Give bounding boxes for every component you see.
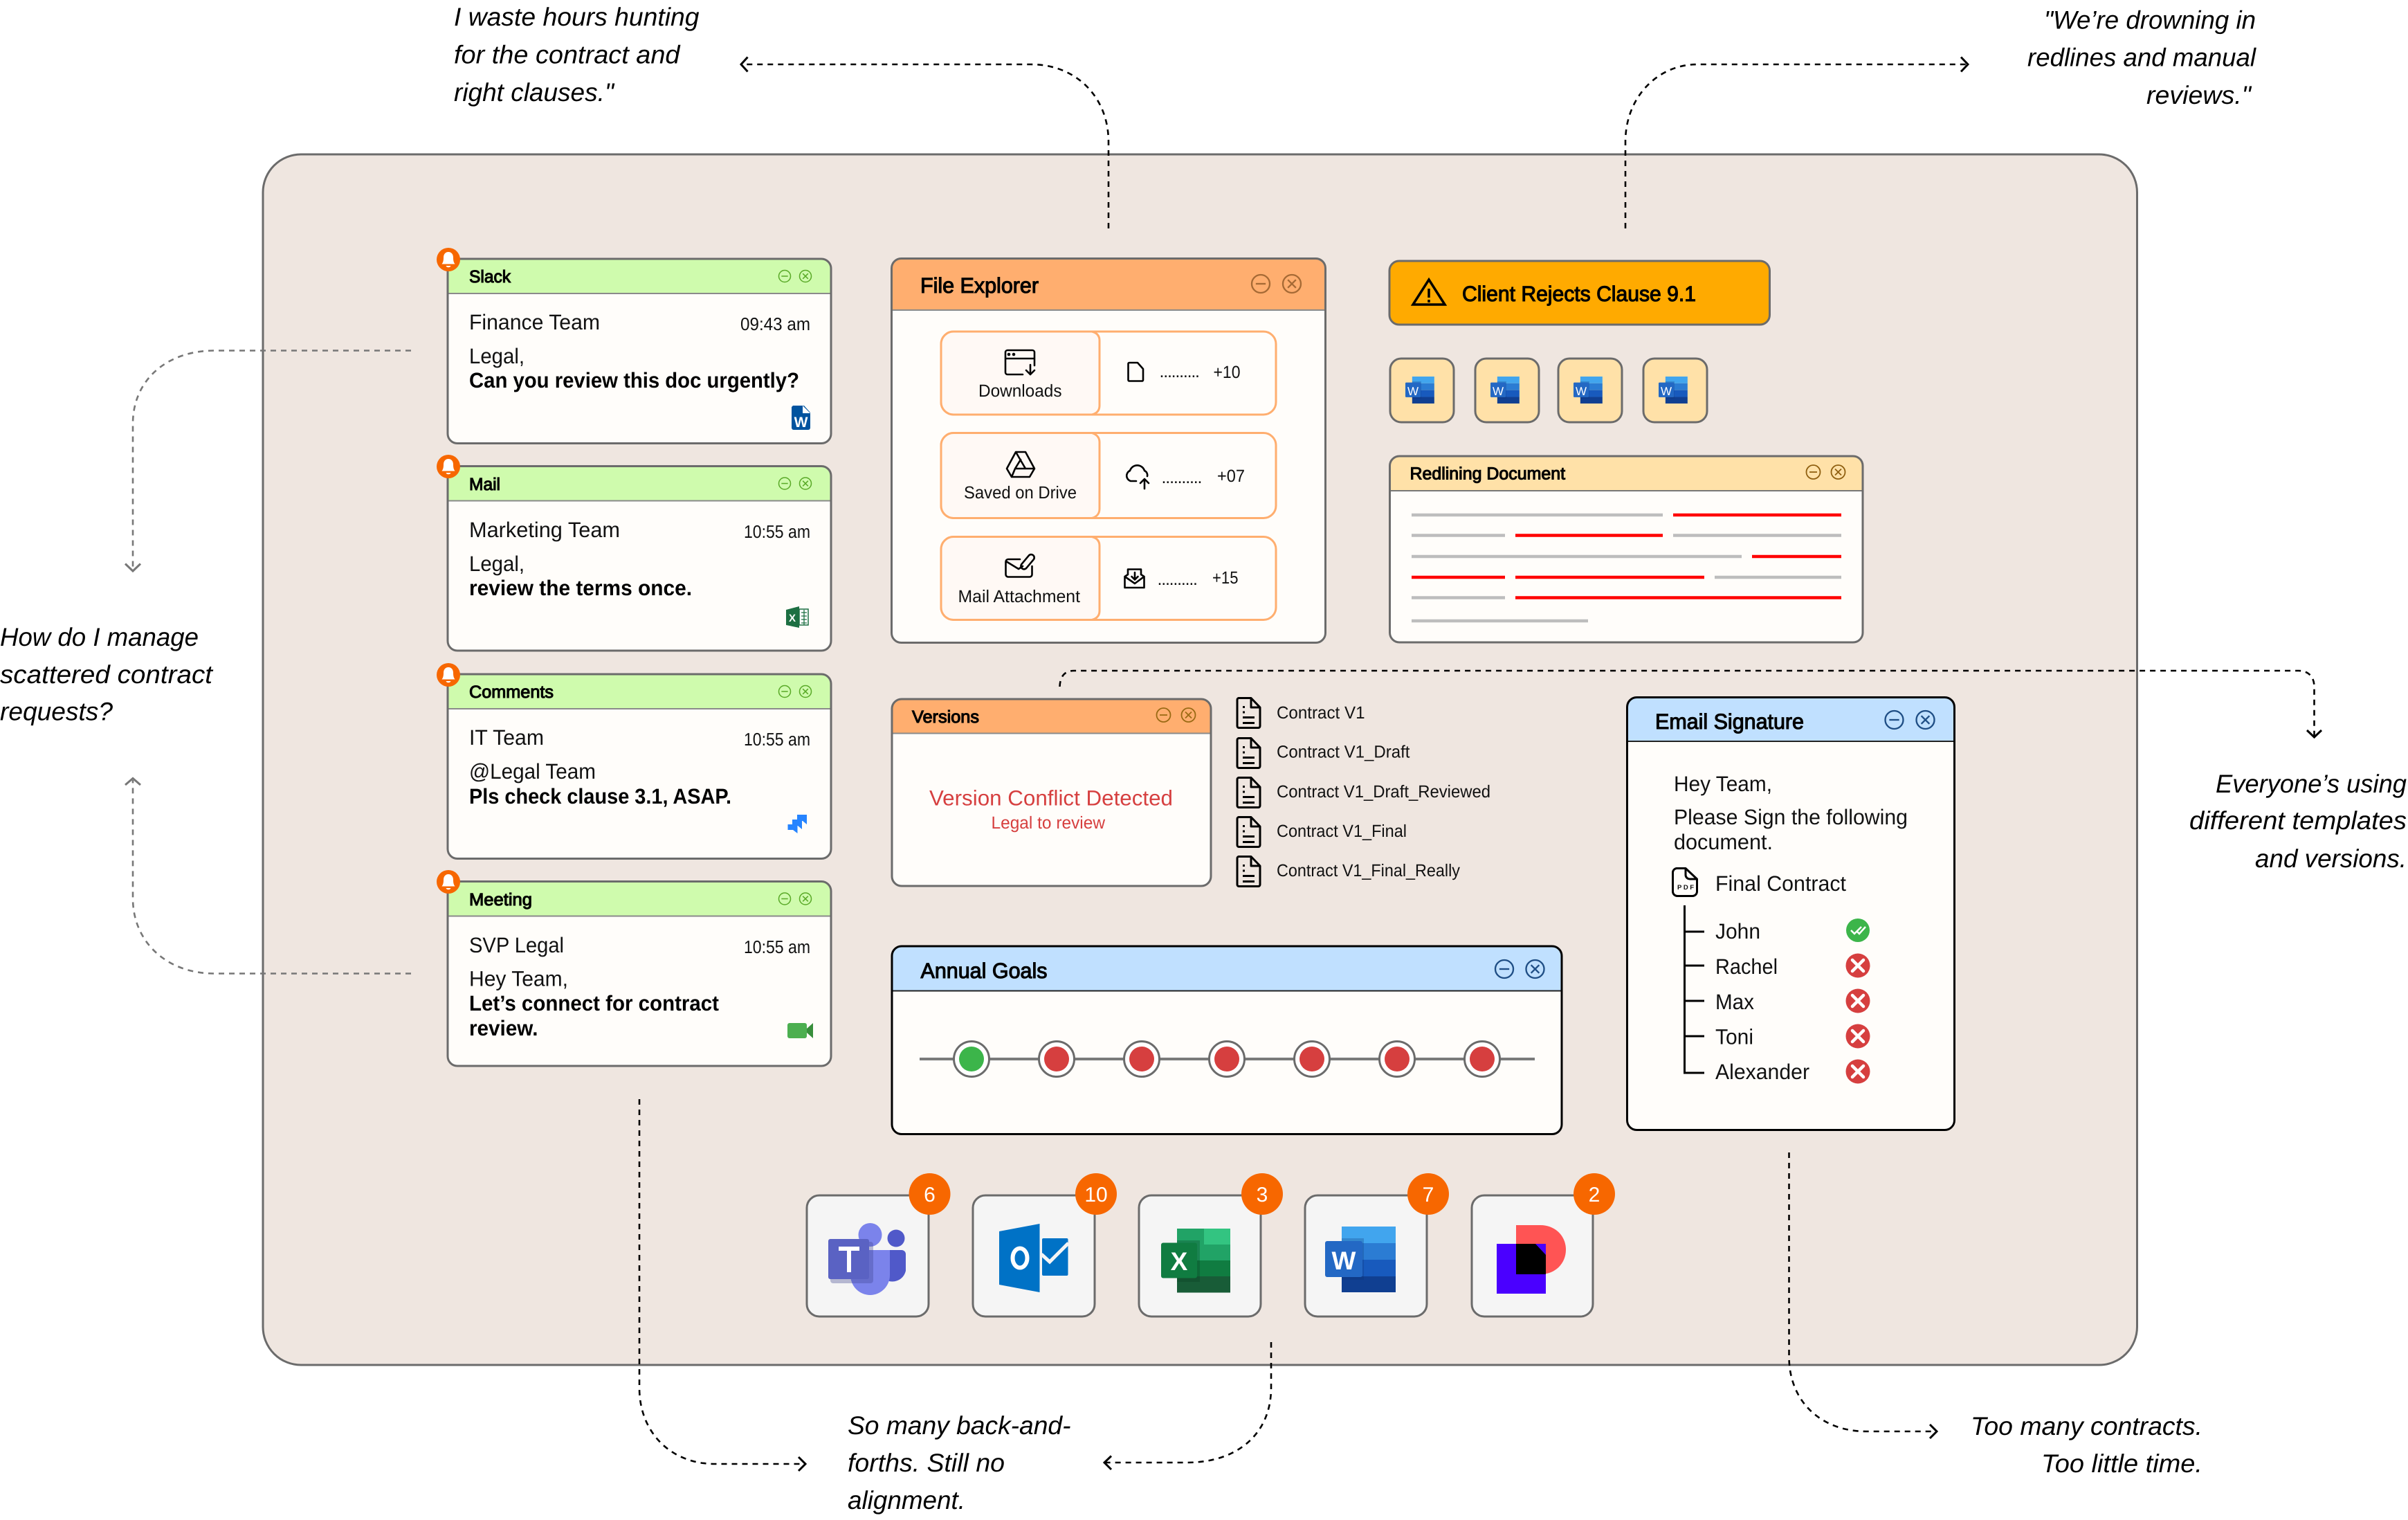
dotted leader: ..........: [1160, 362, 1200, 381]
app tile: Word: [1305, 1173, 1449, 1317]
window controls: [779, 478, 811, 489]
icon: excel: [1161, 1229, 1230, 1293]
message: [469, 759, 731, 808]
sender: IT Team: [469, 725, 544, 750]
signer: Alexander: Alexander: [1715, 1060, 1809, 1084]
icon: excel file: [786, 606, 808, 628]
goal timeline: [920, 1041, 1535, 1077]
icon: pdf logo: [1497, 1225, 1566, 1294]
item: Contract V1_Final_Really: Contract V1_Final_Really: [1277, 861, 1460, 880]
message: [469, 344, 799, 392]
count: +15: [1212, 568, 1239, 588]
arrow: to bottom centre quote from right: [1104, 1342, 1271, 1469]
signer: John: John: [1715, 919, 1760, 943]
icon: excel: X: [1171, 1247, 1188, 1276]
panel: Redlining Document: [1389, 456, 1863, 642]
sender: SVP Legal: [469, 933, 564, 957]
notification count: [1407, 1173, 1449, 1215]
row: Mail Attachment: [941, 537, 1276, 620]
icon: pdf: PDF: [1677, 884, 1694, 892]
signer: Alexander: [1715, 1059, 1870, 1084]
arrow: to bottom centre quote from left: [639, 1099, 805, 1471]
quote: bottom centre: alignment.: [848, 1486, 965, 1514]
quote: bottom centre: forths. Still no: [848, 1449, 1005, 1477]
icon: excel file: X: [789, 613, 796, 624]
quote: bottom right: Too many contracts.: [1971, 1412, 2202, 1440]
quote: top right: redlines and manual: [2027, 43, 2257, 72]
item: Contract V1: [1237, 698, 1365, 728]
message: @Legal Team: [469, 759, 596, 784]
time: 10:55 am: [744, 729, 810, 750]
quote: right: and versions.: [2255, 844, 2407, 873]
message: [469, 552, 692, 600]
heading: Mail: Mail: [469, 475, 500, 494]
heading: Slack: Slack: [469, 267, 511, 287]
quote: right: [2189, 770, 2407, 873]
tile: word file 4: W: [1661, 385, 1672, 398]
notification count: [1075, 1173, 1117, 1215]
alert text: Client Rejects Clause 9.1: [1462, 282, 1696, 306]
icon: notification bell: [437, 870, 460, 894]
quote: top left: for the contract and: [454, 40, 681, 69]
icon: word: [1325, 1227, 1396, 1292]
quote: left: How do I manage: [0, 623, 199, 651]
app tile: Teams: [807, 1173, 951, 1317]
window controls: [1252, 275, 1301, 293]
signer: Max: Max: [1715, 990, 1754, 1014]
panel: Email Signature: [1627, 698, 1954, 1130]
icon: jira: [787, 815, 807, 833]
dotted leader: ..........: [1161, 468, 1203, 487]
quote: top left: I waste hours hunting: [454, 3, 700, 31]
signer tree lines: [1684, 905, 1704, 1073]
window controls: [779, 893, 811, 905]
notification count: [1241, 1173, 1283, 1215]
tile: word file 3: W: [1576, 385, 1587, 398]
arrow: to bottom right quote: [1789, 1152, 1937, 1438]
item: Contract V1_Final: [1237, 817, 1407, 847]
heading: Redlining Document: Redlining Document: [1410, 464, 1565, 483]
icon: drive: [1007, 452, 1034, 477]
count: +07: [1217, 467, 1245, 486]
app tile: Excel: [1139, 1173, 1283, 1317]
app tile: Outlook: [973, 1173, 1117, 1317]
time: 09:43 am: [740, 314, 810, 334]
time: 10:55 am: [744, 937, 810, 957]
card: Meeting: [437, 870, 831, 1066]
window controls: [1157, 708, 1196, 722]
icon: word file: W: [794, 415, 808, 431]
tile: word file 2: W: [1493, 385, 1504, 398]
quote: top left: right clauses.": [454, 78, 615, 107]
icon: pdf: [1673, 868, 1697, 896]
item: Contract V1_Draft_Reviewed: [1237, 778, 1490, 807]
arrow: to right quote: [1060, 671, 2322, 737]
item: Contract V1_Draft_Reviewed: Contract V1_Draft_Reviewed: [1277, 782, 1490, 802]
notification count: [1574, 1173, 1615, 1215]
notification count: 2: [1589, 1184, 1600, 1206]
item: Contract V1: Contract V1: [1277, 703, 1365, 723]
signer: Toni: Toni: [1715, 1024, 1753, 1049]
signer: Rachel: Rachel: [1715, 954, 1778, 979]
conflict sub-message: Legal to review: [991, 813, 1106, 833]
icon: mail attachment: [1006, 553, 1036, 577]
icon: word file: [792, 406, 810, 431]
quote: left: [0, 623, 214, 725]
quote: bottom centre: So many back-and-: [848, 1411, 1071, 1440]
quote: bottom right: Too little time.: [2041, 1449, 2202, 1478]
row: Downloads: [941, 332, 1276, 415]
window controls: [1495, 960, 1544, 978]
signer: Rachel: [1715, 954, 1870, 979]
tile: word file 2: [1475, 359, 1539, 422]
email body: document.: [1674, 830, 1773, 854]
notification count: 6: [924, 1184, 936, 1206]
item: Contract V1_Draft: [1237, 738, 1410, 768]
card: Mail: [437, 455, 831, 651]
message: Pls check clause 3.1, ASAP.: [469, 784, 731, 808]
icon: file: [1128, 363, 1143, 381]
quote: left: requests?: [0, 698, 113, 725]
message: Legal,: [469, 344, 525, 368]
icon: teams: [828, 1223, 906, 1295]
count: +10: [1214, 363, 1240, 382]
notification count: [909, 1173, 951, 1215]
card: Slack: [437, 248, 831, 443]
label: Mail Attachment: [958, 587, 1080, 606]
notification count: 7: [1423, 1184, 1434, 1206]
label: Saved on Drive: [964, 483, 1077, 503]
message: review the terms once.: [469, 576, 692, 600]
tile: word file 1: W: [1407, 385, 1419, 398]
quote: top left: [454, 3, 700, 107]
card: Comments: [437, 663, 831, 858]
window controls: [1885, 711, 1935, 729]
heading: Meeting: Meeting: [469, 890, 532, 910]
row: Saved on Drive: [941, 433, 1276, 518]
quote: left: scattered contract: [0, 660, 214, 689]
icon: notification bell: [437, 455, 460, 478]
heading: Versions: Versions: [912, 707, 979, 727]
item: Contract V1_Draft: Contract V1_Draft: [1277, 742, 1410, 761]
heading: Email Signature: Email Signature: [1655, 709, 1804, 734]
quote: right: Everyone’s using: [2216, 770, 2407, 798]
panel: File Explorer: [891, 259, 1326, 642]
message: Can you review this doc urgently?: [469, 368, 799, 392]
window controls: [779, 270, 811, 282]
icon: inbox download: [1125, 569, 1144, 588]
quote: bottom centre: [848, 1411, 1071, 1514]
quote: top right: "We’re drowning in: [2044, 6, 2256, 35]
icon: outlook: [999, 1224, 1068, 1292]
icon: warning: [1413, 280, 1445, 305]
message: Let’s connect for contract: [469, 991, 719, 1015]
arrow: to top right quote: [1625, 57, 1968, 228]
quote: right: different templates: [2189, 806, 2407, 835]
dotted leader: ..........: [1157, 570, 1198, 589]
icon: notification bell: [437, 248, 460, 271]
attachment name: Final Contract: [1715, 871, 1846, 896]
signer: John: [1715, 919, 1870, 943]
sender: Finance Team: [469, 310, 600, 334]
icon: word: W: [1332, 1247, 1356, 1275]
quote: bottom right: [1971, 1412, 2202, 1478]
icon: download window: [1005, 350, 1034, 374]
arrow: upper left to quote: [125, 350, 411, 571]
item: Contract V1_Final_Really: [1237, 857, 1460, 886]
window controls: [779, 685, 811, 698]
icon: video meeting: [787, 1023, 813, 1038]
icon: notification bell: [437, 663, 460, 687]
item: Contract V1_Final: Contract V1_Final: [1277, 822, 1407, 841]
message: Hey Team,: [469, 966, 568, 991]
message: [469, 966, 719, 1040]
arrow: lower left to quote: [125, 778, 411, 973]
list: contract versions: [1237, 698, 1490, 886]
panel: Versions: [892, 699, 1211, 886]
panel: Annual Goals: [892, 946, 1562, 1134]
tile: word file 1: [1390, 359, 1454, 422]
heading: Annual Goals: Annual Goals: [920, 959, 1048, 983]
word file tiles: [1390, 359, 1707, 422]
heading: File Explorer: File Explorer: [920, 273, 1039, 298]
notification count: 3: [1257, 1184, 1268, 1206]
email body: Please Sign the following: [1674, 805, 1908, 829]
signer: Toni: [1715, 1024, 1870, 1049]
time: 10:55 am: [744, 521, 810, 542]
main beige panel: [263, 154, 2137, 1365]
signer: Max: [1715, 988, 1870, 1014]
heading: Comments: Comments: [469, 682, 554, 702]
redline text lines: [1412, 515, 1841, 621]
conflict message: Version Conflict Detected: [929, 786, 1173, 810]
alert: Client Rejects Clause: [1389, 261, 1770, 325]
email body: Hey Team,: [1674, 772, 1772, 796]
window controls: [1806, 465, 1845, 479]
app tile: PDF tool: [1472, 1173, 1615, 1317]
quote: top right: [2027, 6, 2257, 109]
notification count: 10: [1084, 1184, 1108, 1206]
icon: cloud upload: [1127, 465, 1149, 489]
sender: Marketing Team: [469, 518, 620, 542]
tile: word file 3: [1558, 359, 1622, 422]
message: Legal,: [469, 552, 525, 576]
label: Downloads: [978, 381, 1061, 401]
tile: word file 4: [1643, 359, 1707, 422]
email body: [1674, 772, 1908, 854]
arrow: to top left quote: [741, 57, 1109, 228]
message: review.: [469, 1016, 538, 1040]
quote: top right: reviews.": [2146, 81, 2252, 109]
